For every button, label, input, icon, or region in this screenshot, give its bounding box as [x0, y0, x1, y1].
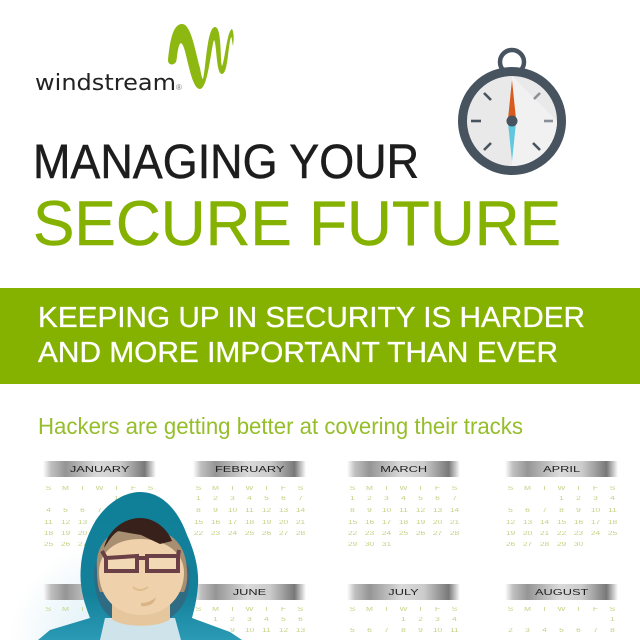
- banner: keeping up in security: AND MORE IMPORTANT THAN EVER: [38, 337, 558, 369]
- calendar: april: 13: [523, 520, 532, 526]
- calendar: april: 12: [506, 520, 515, 526]
- calendar: august: W: [558, 607, 565, 613]
- calendar: june: 1: [213, 617, 218, 623]
- calendar: august: T: [542, 607, 547, 613]
- calendar: june: 2: [230, 617, 235, 623]
- calendar: march: 21: [450, 520, 459, 526]
- calendar: march: 13: [433, 508, 442, 514]
- calendar: march: 29: [348, 542, 357, 548]
- logo: windstream: ®: [176, 83, 182, 92]
- calendar: august: 3: [525, 628, 530, 634]
- calendar: may: F: [131, 607, 136, 613]
- calendar: february: 28: [296, 531, 305, 537]
- calendar: june: F: [281, 607, 286, 613]
- calendar: july: M: [366, 607, 373, 613]
- calendar: january: 14: [95, 520, 104, 526]
- calendar: february: 12: [262, 508, 271, 514]
- calendar: march: 15: [348, 520, 357, 526]
- calendar: july: 1: [401, 617, 406, 623]
- calendar: january: W: [96, 486, 103, 492]
- calendar: january: 26: [61, 542, 70, 548]
- calendar: march: 28: [450, 531, 459, 537]
- calendar: march: 17: [382, 520, 391, 526]
- calendar: april: 10: [591, 508, 600, 514]
- calendar: april: 27: [523, 542, 532, 548]
- calendar: march: 16: [365, 520, 374, 526]
- calendar: february: 11: [245, 508, 254, 514]
- calendar: january: 2: [131, 496, 136, 502]
- calendar: august: S: [508, 607, 513, 613]
- calendar: february: 8: [196, 508, 201, 514]
- calendar: august: 2: [508, 628, 513, 634]
- calendar: august: F: [593, 607, 598, 613]
- calendar: june: S: [196, 607, 201, 613]
- calendar: june: S: [298, 607, 303, 613]
- calendar: february: 22: [194, 531, 203, 537]
- calendar: may: S: [46, 607, 51, 613]
- calendar: january: 29: [112, 542, 121, 548]
- calendar: february: 3: [230, 496, 235, 502]
- calendar: march: 11: [399, 508, 408, 514]
- calendar: july: 6: [367, 628, 372, 634]
- banner: keeping up in security: KEEPING UP IN SECURITY IS HARDER: [38, 302, 585, 334]
- calendar: april: 21: [540, 531, 549, 537]
- title: managing your: MANAGING YOUR: [33, 136, 419, 189]
- calendar: january: JANUARY: [70, 465, 129, 474]
- calendar: february: 18: [245, 520, 254, 526]
- calendar: april: 15: [557, 520, 566, 526]
- calendar: april: W: [558, 486, 565, 492]
- calendar: january: 8: [114, 508, 119, 514]
- calendar: march: T: [418, 486, 423, 492]
- calendar: july: 7: [384, 628, 389, 634]
- calendar: february: 14: [296, 508, 305, 514]
- calendar: april: 14: [540, 520, 549, 526]
- calendar: march: 22: [348, 531, 357, 537]
- calendar: march: MARCH: [380, 465, 427, 474]
- calendar: february: 20: [279, 520, 288, 526]
- calendar: july: 9: [418, 628, 423, 634]
- background glow behind hacker: [0, 530, 120, 640]
- calendar: january: 21: [95, 531, 104, 537]
- calendar: february: 26: [262, 531, 271, 537]
- calendar: august: 5: [559, 628, 564, 634]
- calendar: february: 23: [211, 531, 220, 537]
- calendar: june: W: [246, 607, 253, 613]
- calendar: may: MAY: [86, 588, 113, 597]
- calendar: february: 10: [228, 508, 237, 514]
- calendar: january: T: [114, 486, 119, 492]
- calendar: july: S: [452, 607, 457, 613]
- calendar: july: 4: [452, 617, 457, 623]
- calendar: february: 4: [247, 496, 252, 502]
- title: secure future: SECURE FUTURE: [33, 189, 561, 259]
- calendar: february: 6: [281, 496, 286, 502]
- calendar: january: 10: [146, 508, 155, 514]
- calendar: january: 20: [78, 531, 87, 537]
- calendar: june: 9: [230, 628, 235, 634]
- calendar: may: W: [96, 607, 103, 613]
- calendar: march: 8: [350, 508, 355, 514]
- calendar: april: 9: [576, 508, 581, 514]
- calendar: january: 13: [78, 520, 87, 526]
- calendar: january: [44, 461, 156, 548]
- calendar: june: M: [212, 607, 219, 613]
- calendar: march: M: [366, 486, 373, 492]
- calendar: march: S: [350, 486, 355, 492]
- calendar: april: APRIL: [543, 465, 580, 474]
- calendar: january: 6: [80, 508, 85, 514]
- calendar: april: 25: [608, 531, 617, 537]
- calendar: january: F: [131, 486, 136, 492]
- calendar: april: 11: [608, 508, 617, 514]
- calendar: april: 8: [559, 508, 564, 514]
- calendar: february: 2: [213, 496, 218, 502]
- calendar: august: 4: [542, 628, 547, 634]
- calendar: april: 19: [506, 531, 515, 537]
- calendar: april: 16: [574, 520, 583, 526]
- calendar: february: 27: [279, 531, 288, 537]
- calendar: april: 30: [574, 542, 583, 548]
- calendar: february: 21: [296, 520, 305, 526]
- calendar: february: 9: [213, 508, 218, 514]
- calendar: april: 29: [557, 542, 566, 548]
- calendar: april: 5: [508, 508, 513, 514]
- calendar: march: 19: [416, 520, 425, 526]
- calendar: march: 9: [367, 508, 372, 514]
- calendar: january: 19: [61, 531, 70, 537]
- calendar: june: [196, 584, 306, 634]
- calendar: february: 1: [196, 496, 201, 502]
- calendar: march: 23: [365, 531, 374, 537]
- calendar: april: 20: [523, 531, 532, 537]
- calendar: march: W: [400, 486, 407, 492]
- calendar: april: 1: [559, 496, 564, 502]
- calendar: april: 28: [540, 542, 549, 548]
- calendar: january: 27: [78, 542, 87, 548]
- calendar: january: 9: [131, 508, 136, 514]
- calendar: march: 1: [350, 496, 355, 502]
- calendar: march: 10: [382, 508, 391, 514]
- calendar: june: 3: [247, 617, 252, 623]
- calendar: july: S: [350, 607, 355, 613]
- calendar: march: 3: [384, 496, 389, 502]
- calendar: february: 24: [228, 531, 237, 537]
- calendar: january: 24: [146, 531, 155, 537]
- calendar: june: 11: [262, 628, 271, 634]
- calendar: may: M: [62, 607, 69, 613]
- calendar: march: [348, 461, 460, 548]
- calendar: february: 7: [298, 496, 303, 502]
- calendar: march: 20: [433, 520, 442, 526]
- calendar: april: 4: [610, 496, 615, 502]
- calendar: february: 5: [264, 496, 269, 502]
- calendar: june: 10: [245, 628, 254, 634]
- calendar: january: 15: [112, 520, 121, 526]
- calendar: june: 8: [213, 628, 218, 634]
- calendar: june: T: [264, 607, 269, 613]
- calendar: february: W: [246, 486, 253, 492]
- calendar: february: T: [230, 486, 235, 492]
- logo: windstream: windstream: [35, 71, 176, 96]
- icon: compass: [458, 48, 566, 175]
- calendar: may: S: [148, 607, 153, 613]
- calendar: february: M: [212, 486, 219, 492]
- calendar: march: 4: [401, 496, 406, 502]
- calendar: february: [194, 461, 306, 537]
- calendar: april: 26: [506, 542, 515, 548]
- calendar: june: JUNE: [233, 588, 266, 597]
- calendar: march: 6: [435, 496, 440, 502]
- calendar: march: 24: [382, 531, 391, 537]
- calendar: april: 6: [525, 508, 530, 514]
- calendar: march: 25: [399, 531, 408, 537]
- calendar: april: S: [610, 486, 615, 492]
- calendar: august: [506, 584, 618, 634]
- calendar: june: 5: [281, 617, 286, 623]
- calendar: july: 11: [450, 628, 459, 634]
- calendar: march: 27: [433, 531, 442, 537]
- calendar: january: 1: [114, 496, 119, 502]
- calendar: july: [348, 584, 460, 634]
- calendar: january: S: [148, 486, 153, 492]
- calendar: july: T: [384, 607, 389, 613]
- calendar: february: S: [196, 486, 201, 492]
- calendar: july: 5: [350, 628, 355, 634]
- calendar: april: M: [524, 486, 531, 492]
- calendar: august: S: [610, 607, 615, 613]
- calendar: february: 17: [228, 520, 237, 526]
- calendar: july: 8: [401, 628, 406, 634]
- calendar: april: 2: [576, 496, 581, 502]
- calendar: august: T: [576, 607, 581, 613]
- calendar: july: F: [435, 607, 440, 613]
- calendar: february: F: [281, 486, 286, 492]
- calendar: march: 30: [365, 542, 374, 548]
- calendar: january: 4: [46, 508, 51, 514]
- calendar: april: 7: [542, 508, 547, 514]
- calendar: february: 13: [279, 508, 288, 514]
- calendar: april: [506, 461, 618, 548]
- calendar: february: 16: [211, 520, 220, 526]
- calendar: july: T: [418, 607, 423, 613]
- calendar: august: 8: [610, 628, 615, 634]
- calendar: may: [44, 584, 153, 613]
- calendar: june: 12: [279, 628, 288, 634]
- calendar: march: T: [384, 486, 389, 492]
- calendar: january: T: [80, 486, 85, 492]
- calendar: march: 26: [416, 531, 425, 537]
- calendar: february: FEBRUARY: [215, 465, 284, 474]
- calendar: april: 17: [591, 520, 600, 526]
- subheading: hackers: Hackers are getting better at covering their tracks: [38, 413, 523, 439]
- calendar: february: S: [298, 486, 303, 492]
- calendar: april: F: [593, 486, 598, 492]
- calendar: august: AUGUST: [535, 588, 588, 597]
- calendar: june: T: [230, 607, 235, 613]
- calendar: june: 13: [296, 628, 305, 634]
- calendar: march: 2: [367, 496, 372, 502]
- calendar: march: 7: [452, 496, 457, 502]
- calendar: july: 10: [433, 628, 442, 634]
- calendar: april: T: [576, 486, 581, 492]
- calendar: june: 4: [264, 617, 269, 623]
- calendar: march: 31: [382, 542, 391, 548]
- calendar: january: S: [46, 486, 51, 492]
- calendar: august: M: [524, 607, 531, 613]
- calendar: august: 1: [610, 617, 615, 623]
- calendar: january: 12: [61, 520, 70, 526]
- calendar: february: T: [264, 486, 269, 492]
- calendar: june: 7: [196, 628, 201, 634]
- calendar: march: 12: [416, 508, 425, 514]
- calendar: january: 11: [44, 520, 53, 526]
- calendar: april: 22: [557, 531, 566, 537]
- calendar: march: S: [452, 486, 457, 492]
- calendar: june: 6: [298, 617, 303, 623]
- banner: keeping up in security: [0, 288, 640, 384]
- calendar: august: 7: [593, 628, 598, 634]
- calendar: february: 19: [262, 520, 271, 526]
- calendar: july: W: [400, 607, 407, 613]
- calendar: may: T: [80, 607, 85, 613]
- calendar: march: 5: [418, 496, 423, 502]
- calendar: january: 5: [63, 508, 68, 514]
- calendar: january: 17: [146, 520, 155, 526]
- calendar: january: 28: [95, 542, 104, 548]
- calendar: july: 2: [418, 617, 423, 623]
- calendar: april: 24: [591, 531, 600, 537]
- calendar: january: 31: [146, 542, 155, 548]
- calendar: january: 18: [44, 531, 53, 537]
- calendar: january: 30: [129, 542, 138, 548]
- calendar: july: 3: [435, 617, 440, 623]
- calendar: august: 6: [576, 628, 581, 634]
- calendar: april: 3: [593, 496, 598, 502]
- calendar: february: 25: [245, 531, 254, 537]
- calendar: february: 15: [194, 520, 203, 526]
- calendar: march: F: [435, 486, 440, 492]
- calendar: july: JULY: [388, 588, 419, 597]
- calendar: april: 23: [574, 531, 583, 537]
- logo: windstream: [35, 24, 234, 96]
- calendar: april: T: [542, 486, 547, 492]
- calendar: january: 23: [129, 531, 138, 537]
- calendar: april: S: [508, 486, 513, 492]
- calendar: january: 25: [44, 542, 53, 548]
- calendar: march: 14: [450, 508, 459, 514]
- calendar: january: 16: [129, 520, 138, 526]
- calendar: january: 3: [148, 496, 153, 502]
- calendar: january: 22: [112, 531, 121, 537]
- calendar: may: T: [114, 607, 119, 613]
- calendar: january: M: [62, 486, 69, 492]
- calendar: april: 18: [608, 520, 617, 526]
- calendar: march: 18: [399, 520, 408, 526]
- calendar: january: 7: [97, 508, 102, 514]
